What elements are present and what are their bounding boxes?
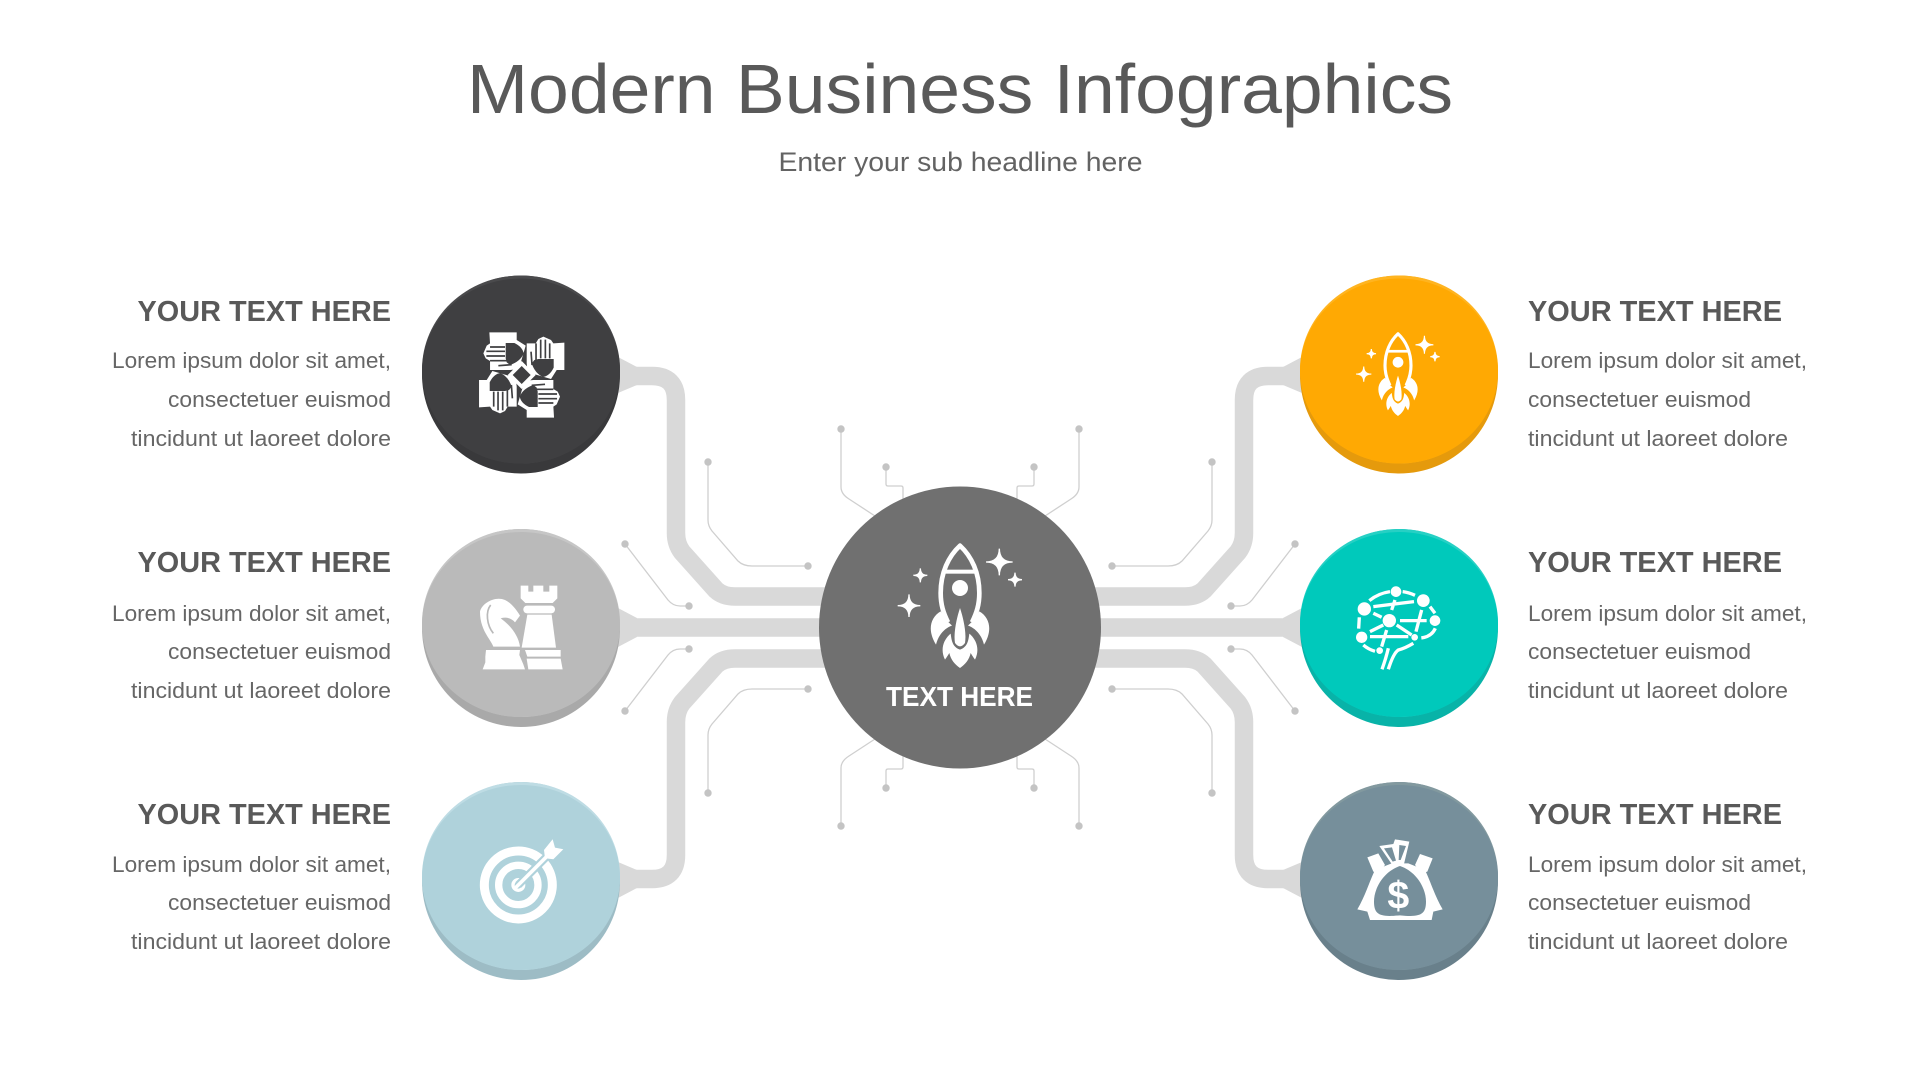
body text: [112, 852, 391, 954]
thick connector pipes: [610, 357, 1310, 898]
body text: consectetuer euismod: [168, 639, 391, 664]
thin circuit lines: bottom left: [621, 645, 903, 830]
circle badge: [1300, 529, 1498, 727]
body text: Lorem ipsum dolor sit amet,: [112, 852, 391, 877]
panel: left item 1 (teamwork): [112, 276, 620, 474]
body text: consectetuer euismod: [168, 387, 391, 412]
heading: YOUR TEXT HERE: [1528, 799, 1782, 831]
circle badge: [422, 276, 620, 474]
icon: chess pieces: [480, 586, 563, 669]
body text: tincidunt ut laoreet dolore: [131, 929, 391, 954]
body text: Lorem ipsum dolor sit amet,: [1528, 601, 1807, 626]
heading: YOUR TEXT HERE: [138, 296, 391, 328]
thin circuit lines: top left: [621, 425, 903, 610]
panel: right item 3 (money): [1300, 782, 1807, 980]
title: Modern Business Infographics: [467, 50, 1453, 128]
icon: money bag: [1357, 839, 1443, 920]
body text: Lorem ipsum dolor sit amet,: [1528, 852, 1807, 877]
body text: [112, 348, 391, 451]
body text: [1528, 852, 1807, 954]
body text: consectetuer euismod: [168, 890, 391, 915]
body text: [112, 601, 391, 703]
body text: tincidunt ut laoreet dolore: [1528, 678, 1788, 703]
panel: left item 3 (target): [112, 782, 620, 980]
body text: consectetuer euismod: [1528, 890, 1751, 915]
heading: YOUR TEXT HERE: [1528, 547, 1782, 579]
central hub: [819, 486, 1101, 768]
body text: tincidunt ut laoreet dolore: [1528, 929, 1788, 954]
body text: [1528, 348, 1807, 451]
subtitle: Enter your sub headline here: [778, 147, 1142, 177]
body text: tincidunt ut laoreet dolore: [1528, 426, 1788, 451]
circle badge: [422, 529, 620, 727]
thin circuit lines: top right: [1017, 425, 1299, 610]
heading: YOUR TEXT HERE: [138, 547, 391, 579]
body text: Lorem ipsum dolor sit amet,: [112, 601, 391, 626]
circle badge: [422, 782, 620, 980]
icon: four hands: [479, 332, 564, 418]
icon: central rocket: [898, 546, 1022, 668]
heading: YOUR TEXT HERE: [1528, 296, 1782, 328]
thin circuit lines: bottom right: [1017, 645, 1299, 830]
circle badge: [1300, 782, 1498, 980]
body text: [1528, 601, 1807, 703]
icon: brain network: [1356, 586, 1440, 669]
panel: left item 2 (strategy): [112, 529, 620, 727]
panel: right item 1 (launch): [1300, 276, 1807, 474]
central label: TEXT HERE: [886, 681, 1033, 712]
circle badge: [1300, 276, 1498, 474]
body text: tincidunt ut laoreet dolore: [131, 426, 391, 451]
icon: target with arrow: [484, 839, 563, 919]
panel: right item 2 (brain): [1300, 529, 1807, 727]
heading: YOUR TEXT HERE: [138, 799, 391, 831]
body text: Lorem ipsum dolor sit amet,: [1528, 348, 1807, 373]
body text: tincidunt ut laoreet dolore: [131, 678, 391, 703]
body text: consectetuer euismod: [1528, 639, 1751, 664]
body text: Lorem ipsum dolor sit amet,: [112, 348, 391, 373]
icon: rocket: [1356, 334, 1440, 416]
icon: money bag: $: [1387, 874, 1409, 918]
body text: consectetuer euismod: [1528, 387, 1751, 412]
